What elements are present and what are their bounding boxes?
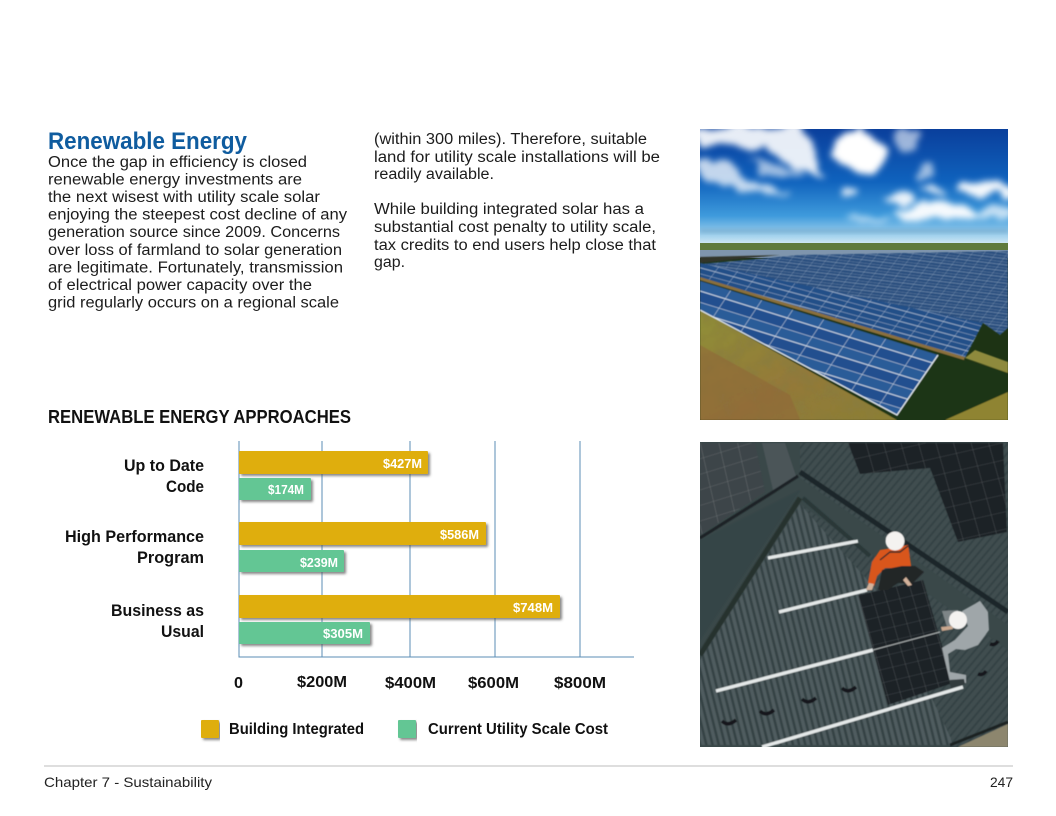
axis labels: $400M bbox=[385, 675, 436, 692]
text block: left column: of electrical power capacity over the bbox=[48, 277, 312, 294]
bar values: $748M bbox=[513, 601, 553, 615]
worker in grey bbox=[941, 601, 989, 688]
text block: right column bbox=[374, 131, 660, 271]
legend bbox=[201, 720, 608, 738]
axis labels bbox=[234, 674, 606, 692]
text block: right column: While building integrated solar has a bbox=[374, 201, 645, 218]
legend swatch: building integrated bbox=[201, 720, 219, 738]
text block: left column: the next wisest with utility scale solar bbox=[48, 189, 320, 206]
legend label: building integrated: Building Integrated bbox=[229, 721, 364, 738]
text block: left column bbox=[48, 154, 347, 312]
roof clips bbox=[722, 641, 998, 724]
dark tree line bbox=[700, 255, 780, 263]
heading: Renewable Energy: Renewable Energy bbox=[48, 128, 247, 155]
text block: right column: gap. bbox=[374, 254, 405, 271]
axis labels: $200M bbox=[297, 674, 347, 691]
text block: left column: enjoying the steepest cost decline of any bbox=[48, 206, 347, 224]
category labels: Code bbox=[166, 478, 204, 496]
text block: left column: over loss of farmland to solar generation bbox=[48, 242, 342, 259]
rails bbox=[716, 541, 963, 747]
bar values bbox=[268, 457, 553, 641]
center solar panel bbox=[858, 580, 953, 705]
far panel field bbox=[700, 251, 1008, 335]
roof planes bbox=[800, 443, 1008, 625]
bar values: $427M bbox=[383, 457, 422, 471]
front panel row bbox=[700, 281, 938, 415]
category labels: Program bbox=[137, 549, 204, 567]
chart title: RENEWABLE ENERGY APPROACHES bbox=[48, 406, 351, 427]
roof ridges bbox=[800, 472, 1008, 612]
pavement corner bbox=[958, 724, 1008, 747]
category labels: Business as bbox=[111, 602, 204, 620]
top-left panels bbox=[700, 443, 765, 535]
bar values: $174M bbox=[268, 483, 304, 497]
bar values: $239M bbox=[300, 556, 338, 570]
text block: right column: land for utility scale installations will be bbox=[374, 149, 660, 166]
text block: left column: are legitimate. Fortunately, transmission bbox=[48, 260, 343, 276]
category labels: Usual bbox=[161, 623, 204, 641]
text block: right column: tax credits to end users help close that bbox=[374, 237, 657, 254]
middle panel row bbox=[700, 263, 983, 358]
bar chart: renewable energy approaches bbox=[65, 441, 634, 692]
axis labels: $600M bbox=[468, 675, 519, 692]
photo: workers installing rooftop solar panels bbox=[700, 442, 1008, 747]
bar values: $586M bbox=[440, 528, 479, 542]
legend label: current utility scale cost: Current Utility Scale Cost bbox=[428, 721, 608, 738]
worker in orange bbox=[866, 532, 924, 590]
footer: chapter label: Chapter 7 - Sustainability bbox=[44, 774, 212, 790]
category labels: High Performance bbox=[65, 528, 204, 546]
text block: left column: renewable energy investments are bbox=[48, 172, 302, 188]
horizon bbox=[700, 243, 1008, 250]
bars: up to date code bbox=[239, 451, 428, 500]
top-right panels bbox=[848, 443, 1007, 542]
ground and shadows bbox=[700, 278, 1008, 421]
category labels bbox=[65, 457, 204, 641]
photo: solar farm under blue sky bbox=[690, 125, 1016, 422]
axis labels: $800M bbox=[554, 675, 606, 692]
text block: right column: readily available. bbox=[374, 166, 494, 183]
text block: right column: (within 300 miles). Therefore, suitable bbox=[374, 131, 647, 148]
bars: business as usual bbox=[239, 595, 560, 644]
footer: page number: 247 bbox=[990, 774, 1013, 790]
bars: high performance program bbox=[239, 522, 486, 572]
bar values: $305M bbox=[323, 627, 363, 641]
text block: left column: generation source since 2009. Concerns bbox=[48, 224, 340, 241]
text block: right column: substantial cost penalty to utility scale, bbox=[374, 219, 656, 236]
text block: left column: Once the gap in efficiency is closed bbox=[48, 154, 307, 171]
legend swatch: current utility scale cost bbox=[398, 720, 416, 738]
axis labels: 0 bbox=[234, 675, 243, 692]
category labels: Up to Date bbox=[124, 457, 204, 475]
text block: left column: grid regularly occurs on a regional scale bbox=[48, 294, 339, 312]
